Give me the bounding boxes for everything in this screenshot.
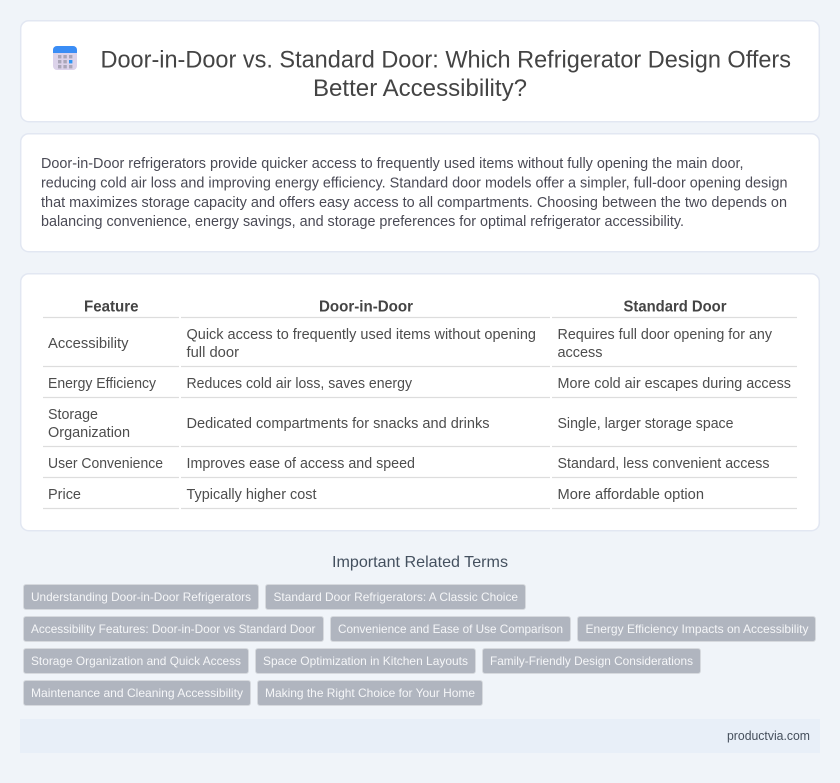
tag <box>258 680 482 706</box>
row: storage organization: Organization <box>48 425 130 441</box>
tag <box>482 648 700 674</box>
footer: productvia.com <box>727 729 810 743</box>
tag <box>330 616 570 642</box>
row: energy efficiency: Energy Efficiency <box>48 376 157 392</box>
header panel <box>21 21 819 122</box>
tag: Making the Right Choice for Your Home <box>265 686 475 700</box>
title: Better Accessibility? <box>313 75 527 102</box>
tag: Maintenance and Cleaning Accessibility <box>31 686 243 700</box>
row: storage organization <box>48 407 734 441</box>
tag <box>24 680 250 706</box>
row: price: More affordable option <box>558 487 704 503</box>
heading: related terms: Important Related Terms <box>332 554 508 571</box>
tag: Standard Door Refrigerators: A Classic Choice <box>274 590 518 604</box>
summary text: balancing convenience, energy savings, and storage preferences for optimal refrigerator accessibility. <box>41 214 684 230</box>
summary text: reducing cold air loss and improving energy efficiency. Standard door models offer a simpler, full-door opening design <box>41 175 788 191</box>
row: price: Price <box>48 487 81 503</box>
row: user convenience <box>48 456 770 472</box>
icon: calendar grid <box>53 46 77 70</box>
row: accessibility: Accessibility <box>48 336 129 352</box>
tag: Storage Organization and Quick Access <box>31 654 241 668</box>
row: accessibility: Requires full door opening for any <box>558 327 773 343</box>
row: storage organization: Dedicated compartments for snacks and drinks <box>186 416 490 432</box>
table header: Feature <box>84 298 139 316</box>
tag: Space Optimization in Kitchen Layouts <box>263 654 468 668</box>
row: user convenience: Improves ease of access and speed <box>186 456 415 472</box>
row: accessibility: full door <box>186 345 239 361</box>
title: Door-in-Door vs. Standard Door: Which Refrigerator Design Offers <box>100 46 791 74</box>
summary text: Door-in-Door refrigerators provide quicker access to frequently used items without fully opening the main door, <box>41 156 744 172</box>
row: user convenience: Standard, less convenient access <box>558 456 770 472</box>
row: price <box>48 487 704 503</box>
table header: Standard Door <box>624 298 726 316</box>
row: accessibility: Quick access to frequently used items without opening <box>186 327 536 343</box>
tag <box>24 648 248 674</box>
tag <box>256 648 476 674</box>
summary text <box>41 156 788 230</box>
tag <box>24 584 258 610</box>
tag: Energy Efficiency Impacts on Accessibility <box>586 622 808 636</box>
tag list <box>24 584 816 706</box>
row: accessibility: access <box>558 345 602 361</box>
row: price: Typically higher cost <box>186 487 316 503</box>
row: energy efficiency: More cold air escapes during access <box>558 376 791 392</box>
table header <box>84 298 726 316</box>
panel: comparison table <box>21 274 819 531</box>
row: storage organization: Single, larger storage space <box>558 416 734 432</box>
row: energy efficiency: Reduces cold air loss, saves energy <box>186 376 413 392</box>
tag <box>24 616 324 642</box>
tag: Convenience and Ease of Use Comparison <box>338 622 563 636</box>
row: energy efficiency <box>48 376 791 392</box>
table header: Door-in-Door <box>319 298 413 316</box>
tag <box>266 584 526 610</box>
row: accessibility <box>48 327 773 361</box>
summary text: that maximizes storage capacity and offers easy access to all compartments. Choosing between the two depends on <box>41 195 787 211</box>
tag: Understanding Door-in-Door Refrigerators <box>31 590 251 604</box>
panel: summary paragraph <box>21 134 819 252</box>
tag: Family-Friendly Design Considerations <box>490 654 693 668</box>
row: user convenience: User Convenience <box>48 456 163 472</box>
tag <box>578 616 816 642</box>
title <box>100 46 791 102</box>
row: storage organization: Storage <box>48 407 98 423</box>
tag: Accessibility Features: Door-in-Door vs Standard Door <box>31 622 316 636</box>
footer <box>20 719 820 753</box>
